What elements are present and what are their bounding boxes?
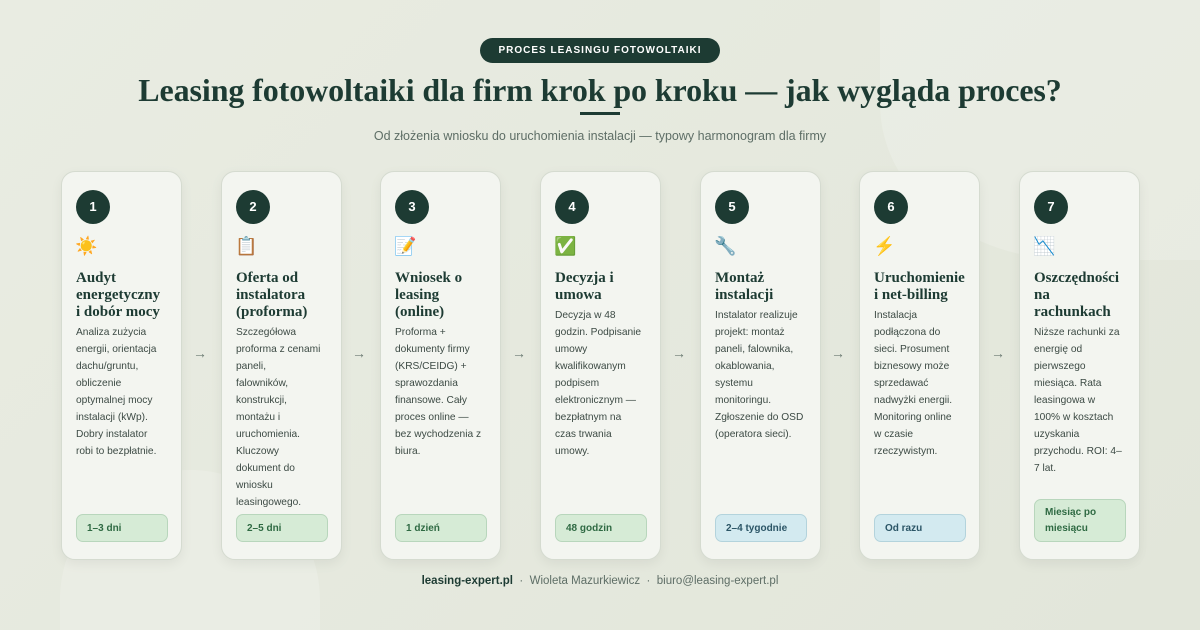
card 2: 2 [249, 199, 257, 214]
card 5 [700, 171, 821, 560]
card 7: uzyskania [1034, 429, 1079, 440]
card 5: Montaż [715, 270, 764, 286]
card 6: rzeczywistym. [874, 446, 937, 457]
card 7: energię od [1034, 344, 1082, 355]
card 1: dachu/gruntu, [76, 361, 138, 372]
card 5: okablowania, [715, 361, 774, 372]
card 4: czas trwania [555, 429, 612, 440]
card 7: przychodu. ROI: 4– [1034, 446, 1122, 457]
card 1 [61, 171, 182, 560]
arrow: → [831, 345, 845, 361]
card 6: Od razu [885, 523, 922, 534]
card 2: dokument do [236, 463, 295, 474]
card 2: wniosku [236, 480, 273, 491]
card 4: 48 godzin [566, 523, 612, 534]
card 4: ✅ [554, 236, 576, 256]
card 5: paneli, falownika, [715, 344, 793, 355]
card 6: Monitoring online [874, 412, 952, 423]
card 5: 🔧 [714, 236, 736, 256]
card 2: Kluczowy [236, 446, 279, 457]
card 3: (KRS/CEIDG) + [395, 361, 467, 372]
card 2: proforma z cenami [236, 344, 320, 355]
card 5: 5 [728, 199, 736, 214]
card 4: bezpłatnym na [555, 412, 621, 423]
card 5: (operatora sieci). [715, 429, 791, 440]
card 7 [1019, 171, 1140, 560]
card 4: 4 [568, 199, 576, 214]
card 4: umowy [555, 344, 587, 355]
card 5: Zgłoszenie do OSD [715, 412, 803, 423]
card 1: Analiza zużycia [76, 327, 146, 338]
card 7: miesiącu [1045, 523, 1088, 534]
card 3: 3 [408, 199, 416, 214]
card 4: podpisem [555, 378, 599, 389]
card 2: montażu i [236, 412, 280, 423]
subtitle: Od złożenia wniosku do uruchomienia instalacji — typowy harmonogram dla firmy [374, 129, 826, 143]
card 7: Niższe rachunki za [1034, 327, 1120, 338]
card 1: i dobór mocy [76, 304, 160, 320]
card 2: leasingowego. [236, 497, 301, 508]
card 3: biura. [395, 446, 420, 457]
card 3: Wniosek o [395, 270, 462, 286]
card 6: w czasie [874, 429, 913, 440]
card 2: konstrukcji, [236, 395, 287, 406]
card 4 [540, 171, 661, 560]
card 3: sprawozdania [395, 378, 458, 389]
card 7: 100% w kosztach [1034, 412, 1113, 423]
footer: leasing-expert.pl · Wioleta Mazurkiewicz · biuro@leasing-expert.pl [422, 575, 778, 587]
card 2: Szczegółowa [236, 327, 296, 338]
badge [480, 38, 720, 63]
card 7: rachunkach [1034, 304, 1111, 320]
card 7: leasingowa w [1034, 395, 1095, 406]
card 6: Instalacja [874, 310, 917, 321]
card 7: 📉 [1033, 236, 1055, 256]
card 1: ☀️ [75, 236, 97, 256]
card 2: Oferta od [236, 270, 298, 286]
card 1: Dobry instalator [76, 429, 147, 440]
card 1: robi to bezpłatnie. [76, 446, 156, 457]
card 1: energetyczny [76, 287, 160, 303]
card 3: (online) [395, 304, 444, 320]
card 5: projekt: montaż [715, 327, 785, 338]
card 2: (proforma) [236, 304, 307, 320]
card 4: kwalifikowanym [555, 361, 626, 372]
title: Leasing fotowoltaiki dla firm krok po kroku — jak wygląda proces? [138, 72, 1062, 108]
card 1: instalacji (kWp). [76, 412, 148, 423]
card 6: podłączona do [874, 327, 940, 338]
card 3: proces online — [395, 412, 469, 423]
card 1: obliczenie [76, 378, 121, 389]
arrow: → [991, 345, 1005, 361]
card 2: instalatora [236, 287, 305, 303]
card 5: instalacji [715, 287, 773, 303]
card 3: bez wychodzenia z [395, 429, 481, 440]
card 1: 1 [89, 199, 97, 214]
card 2 [221, 171, 342, 560]
card 7: 7 [1047, 199, 1055, 214]
card 5: 2–4 tygodnie [726, 523, 787, 534]
badge: PROCES LEASINGU FOTOWOLTAIKI [498, 45, 702, 56]
arrow: → [352, 345, 366, 361]
card 6: ⚡ [873, 236, 895, 256]
card 5: monitoringu. [715, 395, 771, 406]
card 6: i net-billing [874, 287, 948, 303]
card 4: elektronicznym — [555, 395, 636, 406]
card 3: finansowe. Cały [395, 395, 467, 406]
card 6: sprzedawać [874, 378, 928, 389]
card 4: Decyzja w 48 [555, 310, 616, 321]
card 6: 6 [887, 199, 895, 214]
card 4: Decyzja i [555, 270, 614, 286]
arrow: → [672, 345, 686, 361]
card 7: Oszczędności [1034, 270, 1119, 286]
card 7: Miesiąc po [1045, 507, 1096, 518]
card 3: 1 dzień [406, 523, 440, 534]
card 1: Audyt [76, 270, 116, 286]
card 2: uruchomienia. [236, 429, 300, 440]
card 5: systemu [715, 378, 753, 389]
card 7: na [1034, 287, 1050, 303]
card 7: 7 lat. [1034, 463, 1056, 474]
card 1: 1–3 dni [87, 523, 121, 534]
card 4: umowa [555, 287, 602, 303]
card 2: paneli, [236, 361, 266, 372]
arrow: → [193, 345, 207, 361]
card 6 [859, 171, 980, 560]
card 7: pierwszego [1034, 361, 1086, 372]
card 3: 📝 [394, 236, 416, 256]
card 2: 📋 [235, 236, 257, 256]
card 7: miesiąca. Rata [1034, 378, 1101, 389]
card 4: godzin. Podpisanie [555, 327, 641, 338]
card 6: biznesowy może [874, 361, 949, 372]
card 3: dokumenty firmy [395, 344, 470, 355]
card 2: falowników, [236, 378, 288, 389]
card 3: Proforma + [395, 327, 446, 338]
card 2: 2–5 dni [247, 523, 281, 534]
card 3: leasing [395, 287, 439, 303]
card 3 [380, 171, 501, 560]
card 6: sieci. Prosument [874, 344, 949, 355]
card 1: optymalnej mocy [76, 395, 152, 406]
card 6: nadwyżki energii. [874, 395, 952, 406]
arrow: → [512, 345, 526, 361]
card 6: Uruchomienie [874, 270, 965, 286]
card 5: Instalator realizuje [715, 310, 798, 321]
card 1: energii, orientacja [76, 344, 156, 355]
card 4: umowy. [555, 446, 589, 457]
